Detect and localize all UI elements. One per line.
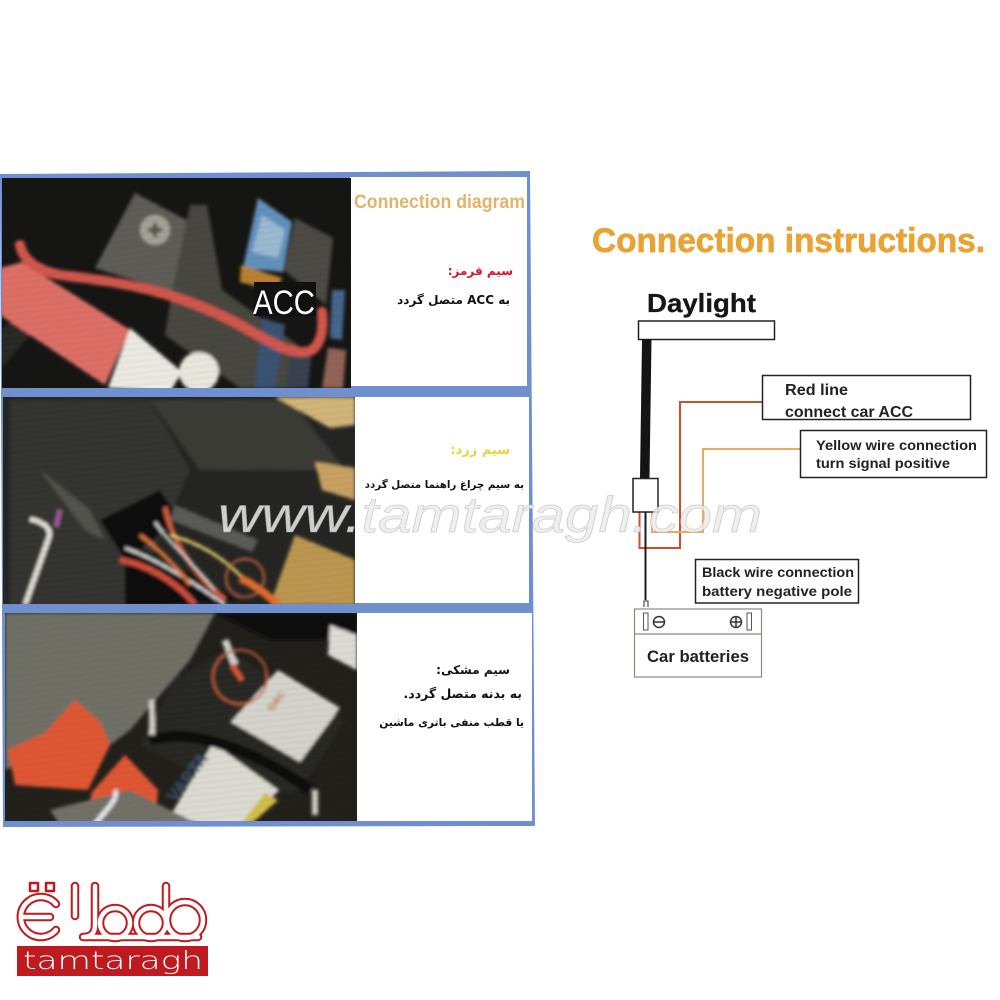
red wire (640, 402, 762, 548)
label: daylight: Daylight (647, 288, 756, 318)
photo: battery terminal: GAC (266, 690, 288, 714)
box: black wire: Black wire connection (702, 564, 854, 580)
logo: tamtaragh (17, 883, 208, 976)
control module (633, 478, 658, 512)
chart: wiring diagram (633, 288, 986, 677)
thick black cable (640, 340, 652, 478)
heading: connection diagram: Connection diagram (354, 192, 525, 213)
watermark: www.tamtaragh.com (218, 487, 762, 543)
box: black wire: battery negative pole (702, 583, 852, 599)
photo: battery terminal: VARTA (163, 750, 213, 805)
photo: fuse box with red wire (0, 178, 351, 392)
logo wordmark bar (17, 946, 208, 976)
box: red line (762, 376, 970, 421)
title: connection instructions: Connection instructions. (592, 222, 985, 260)
yellow wire (652, 449, 800, 532)
logo mark (21, 883, 203, 938)
icon: car battery: Car batteries (647, 647, 749, 666)
text: battery negative instruction: یا قطب منفی باتری ماشین (379, 716, 524, 729)
text: black wire heading: سیم مشکی: (436, 663, 510, 677)
text: black wire instruction: به بدنه متصل گردد. (404, 686, 522, 701)
text: yellow wire heading: سیم زرد: (450, 443, 510, 458)
box: yellow wire: Yellow wire connection (816, 437, 977, 453)
box: red line: Red line (785, 382, 848, 399)
photo: battery terminal (5, 613, 357, 825)
box: black wire (696, 560, 858, 603)
text: yellow wire instruction: به سیم چراغ راهنما متصل گردد (365, 478, 524, 491)
panel: connection diagram frame (0, 171, 535, 827)
thin black wire (644, 512, 646, 600)
label: ACC: ACC (253, 284, 315, 322)
text: red wire instruction: به ACC متصل گردد (397, 293, 510, 307)
box: red line: connect car ACC (785, 404, 913, 421)
box: yellow wire (800, 430, 986, 478)
icon: car battery (634, 601, 762, 677)
daylight bar (638, 321, 774, 340)
photo: turn signal wiring (3, 397, 355, 605)
text: red wire heading: سیم قرمز: (448, 264, 513, 278)
box: yellow wire: turn signal positive (816, 455, 950, 471)
logo wordmark: tamtaragh (23, 946, 203, 975)
